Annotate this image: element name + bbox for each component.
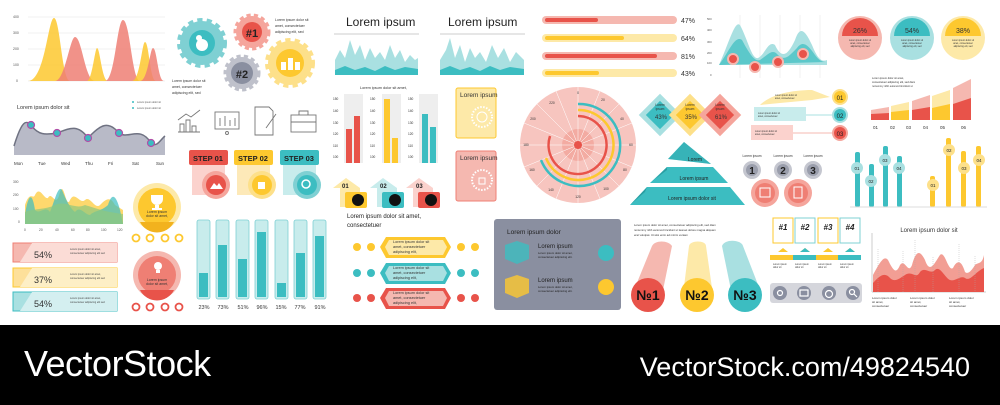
chart: teal wave with markers: 400 [707, 28, 712, 32]
badge: lightbulb circle: dolor sit amet, [146, 282, 168, 286]
circles: 26% 54% 38%: adipiscing elit, sed [851, 45, 870, 48]
chart: stepped growth bars 01-06: 03 [906, 125, 912, 130]
chart: red area chart Lorem ipsum dolor sit: consectetuer [872, 304, 889, 308]
connector list 01 02 03: amet, consectetuer [775, 97, 795, 100]
diamonds: 43% 35% 61%: Lorem [715, 103, 725, 107]
cylinders: No1 No2 No3: №1 [636, 287, 660, 303]
cylinders: No1 No2 No3: Lorem ipsum dolor sit amet, consectetuer adipiscing elit, sed diam [634, 223, 716, 227]
percent bars: 54% 37% 54%: Lorem ipsum dolor sit amet, [70, 297, 101, 300]
chart: radial circle chart: 100 [603, 187, 609, 191]
panel: gray Lorem ipsum dolor: Lorem ipsum dolor [507, 229, 562, 236]
chart: radial circle chart: 120 [575, 195, 581, 199]
icon buttons: gear calendar timer search [770, 283, 862, 303]
chart: red area chart Lorem ipsum dolor sit [872, 228, 986, 308]
circles: 26% 54% 38% [838, 16, 985, 60]
connector list 01 02 03: amet, consectetuer [755, 133, 775, 136]
chart: teal wave with markers: 300 [707, 40, 712, 44]
timeline: #1 #2 #3 #4: Lorem ipsum [795, 263, 809, 266]
chart: stepped growth bars 01-06: 02 [890, 125, 896, 130]
chart: red area chart Lorem ipsum dolor sit: Lorem ipsum dolor [872, 296, 897, 300]
percent bars: 54% 37% 54%: consectetuer adipiscing elit sed [70, 301, 105, 304]
arrows: 01 02 03: Lorem ipsum dolor sit amet, [347, 214, 421, 220]
circles: 26% 54% 38%: adipiscing elit, sed [954, 45, 973, 48]
numbered steps 1 2 3 with icons: Lorem ipsum [803, 154, 823, 158]
percent bars: 54% 37% 54%: Lorem ipsum dolor sit amet, [70, 248, 101, 251]
chart: stepped growth bars 01-06 [871, 75, 973, 130]
chart: peaks area chart: 0 [16, 79, 18, 83]
hexagon list rows: adipiscing elit, [393, 276, 417, 280]
diamonds: 43% 35% 61%: 43% [655, 115, 668, 121]
chart: vertical progress tubes: 96% [256, 305, 268, 311]
chart: weekly wave line chart: Fri [108, 161, 113, 166]
timeline: #1 #2 #3 #4: #4 [846, 223, 855, 232]
timeline: #1 #2 #3 #4: dolor sit [773, 266, 782, 269]
lollipop bars teal and yellow: 03 [961, 166, 967, 171]
timeline: #1 #2 #3 #4: #3 [824, 223, 833, 232]
timeline: #1 #2 #3 #4: #2 [801, 223, 810, 232]
gears cluster [172, 16, 312, 95]
footer: black watermark band: VectorStock [24, 343, 212, 384]
chart: grouped bar chart: 120 [408, 132, 414, 136]
chart: grouped bar chart: 130 [408, 121, 414, 125]
chart: weekly wave line chart [14, 101, 165, 166]
steps: STEP 01 / 02 / 03: STEP 03 [284, 154, 314, 163]
lollipop bars teal and yellow: 01 [854, 166, 860, 171]
numbered steps 1 2 3 with icons: 2 [780, 166, 786, 177]
chart: grouped bar chart: 130 [333, 121, 339, 125]
badge: trophy circle [132, 183, 182, 242]
lollipop bars teal and yellow: 02 [868, 179, 874, 184]
lollipop bars teal and yellow: 02 [946, 148, 952, 153]
chart: radial circle chart: 80 [623, 168, 627, 172]
pyramid: three teal tiers: Lorem ipsum dolor sit [668, 196, 717, 202]
chart: overlapping area chart: 300 [13, 180, 19, 184]
chart: weekly wave line chart: Tue [38, 161, 46, 166]
chart: grouped bar chart: 100 [333, 155, 339, 159]
gears cluster: Lorem ipsum dolor sit [172, 79, 205, 83]
chart: stepped growth bars 01-06: nonummy nibh euismod tincidunt ut [872, 84, 913, 88]
chart: overlapping area chart: 200 [13, 193, 19, 197]
diamonds: 43% 35% 61%: Lorem [685, 103, 695, 107]
chart: peaks area chart [13, 15, 165, 83]
connector list 01 02 03: 03 [837, 132, 844, 138]
connector list 01 02 03: Lorem ipsum dolor sit [755, 130, 777, 133]
diamonds: 43% 35% 61%: ipsum [686, 107, 695, 111]
cylinders: No1 No2 No3: nonummy nibh euismod tincidunt ut laoreet dolore magna aliquam [634, 228, 716, 232]
chart: radial circle chart: 20 [601, 98, 605, 102]
connector list 01 02 03: 01 [837, 96, 844, 102]
chart: teal wave with markers: 100 [707, 61, 712, 65]
hexagon list rows: amet, consectetuer [393, 271, 426, 275]
chart: radial circle chart: 180 [523, 143, 529, 147]
chart: grouped bar chart: Lorem ipsum dolor sit amet, [360, 86, 407, 90]
timeline: #1 #2 #3 #4: #1 [779, 223, 788, 232]
hexagon list rows: amet, consectetuer [393, 296, 426, 300]
chart: weekly wave line chart: Lorem ipsum dolor sit [137, 107, 161, 110]
chart: grouped bar chart: 150 [370, 97, 376, 101]
chart: radial circle chart: 0 [577, 91, 579, 95]
chart: weekly wave line chart: Thu [85, 161, 93, 166]
chart: peaks area chart: 100 [13, 63, 19, 67]
chart: grouped bar chart: 140 [370, 109, 376, 113]
chart: grouped bar chart: 100 [408, 155, 414, 159]
arrows: 01 02 03 [333, 178, 440, 229]
panel: gray Lorem ipsum dolor: Lorem ipsum dolor sit amet, [538, 251, 573, 255]
arrows: 01 02 03: 03 [416, 184, 423, 190]
gears cluster: Lorem ipsum dolor sit [275, 18, 308, 22]
chart: red area chart Lorem ipsum dolor sit: consectetuer [910, 304, 927, 308]
gears cluster: amet, consectetuer [172, 85, 203, 89]
percent bars: 54% 37% 54%: 54% [34, 299, 52, 309]
lollipop bars teal and yellow: 01 [930, 183, 936, 188]
chart: vertical progress tubes: 91% [314, 305, 326, 311]
chart: vertical progress tubes: 15% [275, 305, 287, 311]
hexagon list rows: Lorem ipsum dolor sit [393, 291, 430, 295]
timeline: #1 #2 #3 #4: dolor sit [795, 266, 804, 269]
chart: radial circle chart: 160 [529, 168, 535, 172]
chart: peaks area chart: 300 [13, 31, 19, 35]
gears cluster: #1 [246, 28, 258, 40]
chart: grouped bar chart: 100 [370, 155, 376, 159]
hexagon list rows: adipiscing elit, [393, 301, 417, 305]
cylinders: No1 No2 No3 [631, 223, 762, 312]
lollipop bars teal and yellow: 04 [896, 166, 902, 171]
cards: Lorem ipsum dollar and lock [456, 88, 498, 201]
gears cluster: amet, consectetuer [275, 24, 306, 28]
chart: grouped bar chart: 120 [370, 132, 376, 136]
progress bars: 47% 64% 81% 43%: 47% [681, 18, 695, 25]
progress bars: 47% 64% 81% 43%: 81% [681, 54, 695, 61]
chart: grouped bar chart: 150 [408, 97, 414, 101]
chart: teal wave with markers: 500 [707, 17, 712, 21]
cards: Lorem ipsum dollar and lock: Lorem ipsum [460, 155, 498, 162]
diamonds: 43% 35% 61% [639, 94, 741, 136]
panel: gray Lorem ipsum dolor: Lorem ipsum dolor sit amet, [538, 285, 573, 289]
progress bars: 47% 64% 81% 43%: 43% [681, 71, 695, 78]
chart: grouped bar chart: 140 [408, 109, 414, 113]
chart: grouped bar chart [333, 86, 438, 163]
chart: overlapping area chart: 60 [71, 228, 75, 232]
chart: vertical progress tubes: 51% [237, 305, 249, 311]
chart: grouped bar chart: 130 [370, 121, 376, 125]
connector list 01 02 03: 02 [837, 114, 844, 120]
panel: gray Lorem ipsum dolor: Lorem ipsum [538, 278, 573, 284]
chart: red area chart Lorem ipsum dolor sit: consectetuer [949, 304, 966, 308]
chart: radial circle chart: 40 [620, 117, 624, 121]
percent bars: 54% 37% 54%: consectetuer adipiscing elit sed [70, 252, 105, 255]
panel: Lorem ipsum teal area charts: Lorem ipsum [346, 15, 415, 29]
percent bars: 54% 37% 54% [13, 243, 117, 311]
gears cluster: #2 [236, 69, 248, 81]
chart: stepped growth bars 01-06: 04 [923, 125, 929, 130]
steps: STEP 01 / 02 / 03: STEP 01 [193, 154, 223, 163]
chart: red area chart Lorem ipsum dolor sit: Lorem ipsum dolor [910, 296, 935, 300]
circles: 26% 54% 38%: 38% [956, 28, 970, 35]
chart: weekly wave line chart: Lorem ipsum dolor sit [137, 101, 161, 104]
connector list 01 02 03: amet, consectetuer [758, 115, 778, 118]
steps: STEP 01 / 02 / 03 [189, 150, 321, 199]
badge: lightbulb circle: Lorem ipsum [147, 278, 167, 282]
lollipop bars teal and yellow: 03 [882, 158, 888, 163]
chart: overlapping area chart: 0 [18, 220, 20, 224]
chart: red area chart Lorem ipsum dolor sit: sit amet, [949, 300, 961, 304]
panel: gray Lorem ipsum dolor: consectetuer adipiscing elit. [538, 289, 573, 293]
diamonds: 43% 35% 61%: ipsum [656, 107, 665, 111]
chart: stepped growth bars 01-06: 06 [961, 125, 967, 130]
chart: overlapping area chart: 120 [117, 228, 123, 232]
chart: radial circle chart [520, 87, 636, 203]
chart: grouped bar chart: 120 [333, 132, 339, 136]
gears cluster: adipiscing elit, sed [172, 91, 201, 95]
connector list 01 02 03: Lorem ipsum dolor sit [775, 94, 797, 97]
chart: teal wave with markers [707, 15, 827, 78]
chart: weekly wave line chart: Wed [61, 161, 71, 166]
connector list 01 02 03 [751, 89, 848, 141]
circles: 26% 54% 38%: amet, consectetuer [902, 42, 922, 45]
chart: vertical progress tubes: 23% [198, 305, 210, 311]
numbered steps 1 2 3 with icons [742, 154, 823, 207]
circles: 26% 54% 38%: adipiscing elit, sed [903, 45, 922, 48]
numbered steps 1 2 3 with icons: 3 [810, 166, 816, 177]
panel: gray Lorem ipsum dolor: consectetuer adipiscing elit. [538, 255, 573, 259]
chart: peaks area chart: 200 [13, 47, 19, 51]
footer: black watermark band: VectorStock.com/49824540 [640, 352, 970, 382]
chart: vertical progress tubes: 73% [217, 305, 229, 311]
chart: red area chart Lorem ipsum dolor sit: sit amet, [910, 300, 922, 304]
chart: overlapping area chart: 100 [13, 207, 19, 211]
lollipop bars teal and yellow [850, 138, 987, 207]
chart: weekly wave line chart: Sat [132, 161, 140, 166]
chart: grouped bar chart: 140 [333, 109, 339, 113]
timeline: #1 #2 #3 #4: dolor sit [818, 266, 827, 269]
chart: radial circle chart: 220 [549, 101, 555, 105]
chart: radial circle chart: 200 [530, 117, 536, 121]
panel: Lorem ipsum teal area charts [334, 15, 525, 75]
circles: 26% 54% 38%: amet, consectetuer [850, 42, 870, 45]
hexagon list rows: Lorem ipsum dolor sit [393, 266, 430, 270]
progress bars: 47% 64% 81% 43%: 64% [681, 36, 695, 43]
icons row: outline business icons [178, 107, 316, 135]
connector list 01 02 03: Lorem ipsum dolor sit [758, 112, 780, 115]
badge: trophy circle: Lorem ipsum [147, 210, 167, 214]
chart: overlapping area chart: 100 [101, 228, 107, 232]
timeline: #1 #2 #3 #4: Lorem ipsum [818, 263, 832, 266]
panel: gray Lorem ipsum dolor: Lorem ipsum [538, 244, 573, 250]
cylinders: No1 No2 No3: №2 [685, 287, 709, 303]
percent bars: 54% 37% 54%: Lorem ipsum dolor sit amet, [70, 273, 101, 276]
circles: 26% 54% 38%: 26% [853, 28, 867, 35]
chart: overlapping area chart: 80 [86, 228, 90, 232]
panel: Lorem ipsum teal area charts: Lorem ipsum [448, 15, 517, 29]
chart: weekly wave line chart: Sun [156, 161, 165, 166]
diamonds: 43% 35% 61%: 61% [715, 115, 728, 121]
timeline: #1 #2 #3 #4: Lorem ipsum [840, 263, 854, 266]
chart: grouped bar chart: 110 [408, 144, 413, 148]
cylinders: No1 No2 No3: №3 [733, 287, 757, 303]
hexagon list rows: Lorem ipsum dolor sit [393, 240, 430, 244]
chart: overlapping area chart: 0 [24, 228, 26, 232]
chart: stepped growth bars 01-06: 01 [873, 125, 879, 130]
chart: stepped growth bars 01-06: 05 [940, 125, 946, 130]
timeline: #1 #2 #3 #4 [770, 218, 861, 269]
arrows: 01 02 03: consectetuer [347, 223, 381, 229]
chart: red area chart Lorem ipsum dolor sit: Lorem ipsum dolor [949, 296, 974, 300]
chart: overlapping area chart: 40 [55, 228, 59, 232]
chart: grouped bar chart: 150 [333, 97, 339, 101]
percent bars: 54% 37% 54%: 54% [34, 250, 52, 260]
timeline: #1 #2 #3 #4: Lorem ipsum [773, 263, 787, 266]
diamonds: 43% 35% 61%: Lorem [655, 103, 665, 107]
panel: gray Lorem ipsum dolor [494, 219, 621, 310]
chart: weekly wave line chart: Mon [14, 161, 23, 166]
cards: Lorem ipsum dollar and lock: Lorem ipsum [460, 92, 498, 99]
chart: teal wave with markers: 0 [710, 73, 712, 77]
circles: 26% 54% 38%: Lorem ipsum dolor sit [849, 39, 871, 42]
chart: radial circle chart: 60 [629, 143, 633, 147]
hexagon list rows [353, 237, 479, 309]
progress bars: 47% 64% 81% 43% [542, 16, 695, 78]
circles: 26% 54% 38%: amet, consectetuer [953, 42, 973, 45]
chart: overlapping area chart [13, 180, 123, 232]
numbered steps 1 2 3 with icons: Lorem ipsum [742, 154, 762, 158]
badge: trophy circle: dolor sit amet, [146, 214, 168, 218]
badge: lightbulb circle [132, 251, 182, 310]
pyramid: three teal tiers [630, 142, 745, 205]
circles: 26% 54% 38%: Lorem ipsum dolor sit [901, 39, 923, 42]
chart: peaks area chart: 400 [13, 15, 19, 19]
cylinders: No1 No2 No3: erat volutpat. Ut wisi enim ad minim veniam [634, 233, 689, 237]
pyramid: three teal tiers: Lorem [688, 157, 702, 163]
arrows: 01 02 03: 01 [342, 184, 349, 190]
numbered steps 1 2 3 with icons: 1 [749, 166, 755, 177]
arrows: 01 02 03: 02 [380, 184, 387, 190]
numbered steps 1 2 3 with icons: Lorem ipsum [773, 154, 793, 158]
chart: red area chart Lorem ipsum dolor sit: Lorem ipsum dolor sit [900, 228, 958, 234]
circles: 26% 54% 38%: 54% [905, 28, 919, 35]
chart: grouped bar chart: 110 [370, 144, 375, 148]
footer: black watermark band [0, 325, 1000, 405]
pyramid: three teal tiers: Lorem ipsum [680, 176, 708, 182]
chart: radial circle chart: 140 [548, 188, 554, 192]
gears cluster: adipiscing elit, sed [275, 30, 304, 34]
hexagon list rows: amet, consectetuer [393, 245, 426, 249]
percent bars: 54% 37% 54%: consectetuer adipiscing elit sed [70, 277, 105, 280]
chart: weekly wave line chart: Lorem ipsum dolor sit [17, 105, 70, 111]
circles: 26% 54% 38%: Lorem ipsum dolor sit [952, 39, 974, 42]
diamonds: 43% 35% 61%: 35% [685, 115, 698, 121]
steps: STEP 01 / 02 / 03: STEP 02 [238, 154, 268, 163]
chart: grouped bar chart: 110 [333, 144, 338, 148]
chart: red area chart Lorem ipsum dolor sit: sit amet, [872, 300, 884, 304]
chart: vertical progress tubes [197, 220, 326, 311]
chart: teal wave with markers: 200 [707, 51, 712, 55]
chart: stepped growth bars 01-06: Lorem ipsum dolor sit amet, [872, 76, 904, 80]
hexagon list rows: adipiscing elit, [393, 250, 417, 254]
percent bars: 54% 37% 54%: 37% [34, 275, 52, 285]
chart: vertical progress tubes: 77% [294, 305, 306, 311]
timeline: #1 #2 #3 #4: dolor sit [840, 266, 849, 269]
chart: stepped growth bars 01-06: consectetuer adipiscing elit, sed diam [872, 80, 915, 84]
diamonds: 43% 35% 61%: ipsum [716, 107, 725, 111]
lollipop bars teal and yellow: 04 [976, 158, 982, 163]
chart: overlapping area chart: 20 [39, 228, 43, 232]
